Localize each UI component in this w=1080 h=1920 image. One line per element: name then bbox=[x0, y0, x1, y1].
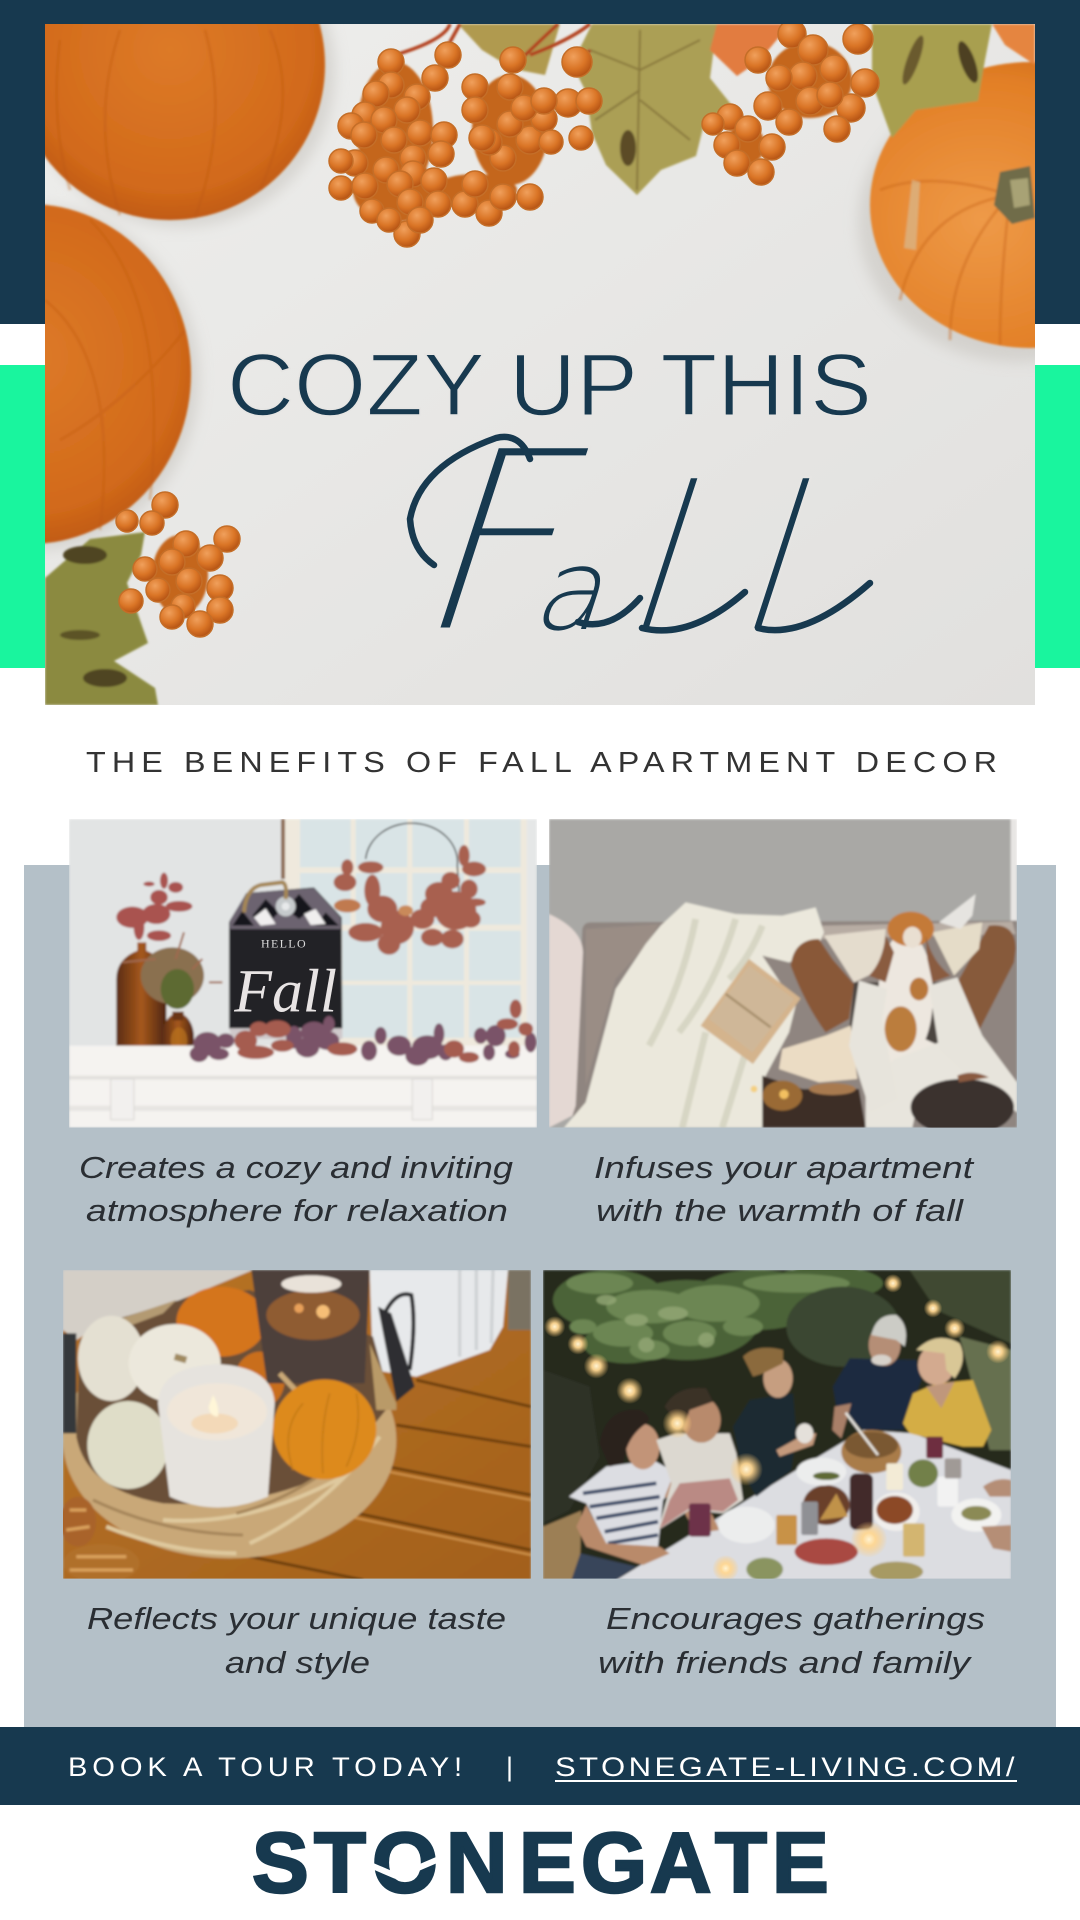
title: Cozy up this: COZY UP THIS bbox=[227, 335, 872, 434]
left mint band bbox=[0, 365, 45, 668]
glass bbox=[689, 1503, 711, 1537]
caption: infuses your apartment bbox=[594, 1150, 975, 1228]
caption: creates a cozy: atmosphere for relaxation bbox=[86, 1193, 508, 1228]
book bbox=[701, 959, 801, 1064]
call to action bar: | bbox=[506, 1752, 513, 1782]
mantel bbox=[69, 1046, 537, 1128]
orange pumpkins bbox=[176, 1287, 266, 1357]
logo: Stonegate wordmark: STONEGATE bbox=[252, 1816, 829, 1911]
caption: reflects your taste: Reflects your unique taste bbox=[87, 1601, 506, 1636]
berry cluster: top centre bbox=[329, 42, 602, 247]
berry cluster: top right bbox=[702, 20, 879, 185]
throw bbox=[63, 1270, 253, 1340]
foliage bbox=[553, 1267, 883, 1363]
cat bbox=[877, 938, 934, 1040]
berry cluster: bottom left bbox=[116, 492, 240, 637]
caption: infuses your apartment: Infuses your apartment bbox=[594, 1150, 975, 1185]
top navy band bbox=[0, 0, 1080, 324]
caption: creates a cozy bbox=[79, 1150, 513, 1228]
white pumpkins bbox=[78, 1316, 145, 1401]
dark candle bbox=[251, 1270, 370, 1383]
flowers bbox=[63, 1498, 93, 1538]
dark floor and fairy lights bbox=[762, 1076, 866, 1128]
title: Fall script word: l bbox=[602, 445, 733, 677]
caption: reflects your taste: and style bbox=[225, 1645, 370, 1680]
cushion bbox=[549, 914, 583, 1128]
basket bbox=[63, 1391, 398, 1560]
gap behind cat bbox=[848, 981, 938, 1044]
string lights bbox=[544, 1274, 1010, 1582]
photo: candles and pumpkins in basket bbox=[60, 1270, 531, 1583]
photo: family dinner in the garden bbox=[543, 1267, 1011, 1582]
white candle bbox=[158, 1364, 275, 1507]
man in white tee bbox=[656, 1433, 743, 1530]
striped shirt woman bbox=[569, 1460, 683, 1552]
white box bbox=[370, 1270, 508, 1377]
wreath leaves bbox=[334, 845, 486, 955]
right mint band bbox=[1035, 365, 1080, 668]
caption: encourages gatherings: with friends and family bbox=[598, 1645, 973, 1680]
caption: creates a cozy: Creates a cozy and inviting bbox=[79, 1150, 513, 1185]
title: Fall script word: l bbox=[714, 445, 845, 677]
sofa bbox=[572, 921, 1017, 1128]
caption: encourages gatherings: Encourages gatherings bbox=[606, 1601, 985, 1636]
garland bbox=[190, 1016, 537, 1066]
sweater bbox=[864, 1042, 966, 1128]
table setting bbox=[718, 1507, 775, 1543]
subtitle: THE BENEFITS OF FALL APARTMENT DECOR bbox=[86, 747, 1003, 779]
bench bbox=[543, 1511, 581, 1580]
legs bbox=[791, 939, 854, 1032]
table plank lines bbox=[243, 1380, 531, 1580]
sign tag bbox=[229, 887, 342, 1028]
branch on bottle bbox=[116, 873, 192, 941]
berry underlay shadows bbox=[152, 42, 852, 615]
sprig of greenery bbox=[122, 932, 222, 1009]
bottle and vase bbox=[116, 942, 166, 1056]
woman in yellow bbox=[903, 1380, 991, 1447]
title: Fall script word: F bbox=[389, 398, 627, 688]
sign lettering: HELLO bbox=[261, 937, 307, 951]
throw over lap bbox=[824, 929, 886, 982]
photo: cat and knit blanket bbox=[549, 819, 1017, 1136]
caption: encourages gatherings bbox=[598, 1601, 985, 1680]
man with white hair bbox=[833, 1358, 921, 1430]
orange pumpkin front bbox=[276, 1370, 298, 1392]
bowl and utensil bbox=[841, 1430, 901, 1473]
scissors handle bbox=[385, 1294, 413, 1370]
slate panel bbox=[24, 865, 1056, 1727]
caption: reflects your taste bbox=[87, 1601, 506, 1680]
hair bbox=[911, 1079, 1014, 1136]
blanket bbox=[564, 902, 824, 1128]
photo: mantel decor: Fall bbox=[233, 958, 337, 1026]
jeans bbox=[571, 1553, 636, 1580]
hero photo: pumpkins, berries and leaves bbox=[0, 0, 1080, 705]
call to action bar: BOOK A TOUR TODAY! bbox=[68, 1752, 467, 1782]
call to action bar: STONEGATE-LIVING.COM/ bbox=[555, 1752, 1018, 1782]
flourish: connecting swashes of the script word bbox=[410, 437, 870, 630]
photo: mantel decor bbox=[69, 819, 537, 1128]
call to action bar bbox=[0, 1727, 1080, 1805]
woman in dark dress bbox=[733, 1393, 796, 1497]
title: Fall script word: a bbox=[521, 526, 632, 656]
caption: infuses your apartment: with the warmth of fall bbox=[596, 1193, 964, 1228]
table bbox=[616, 1430, 1011, 1580]
